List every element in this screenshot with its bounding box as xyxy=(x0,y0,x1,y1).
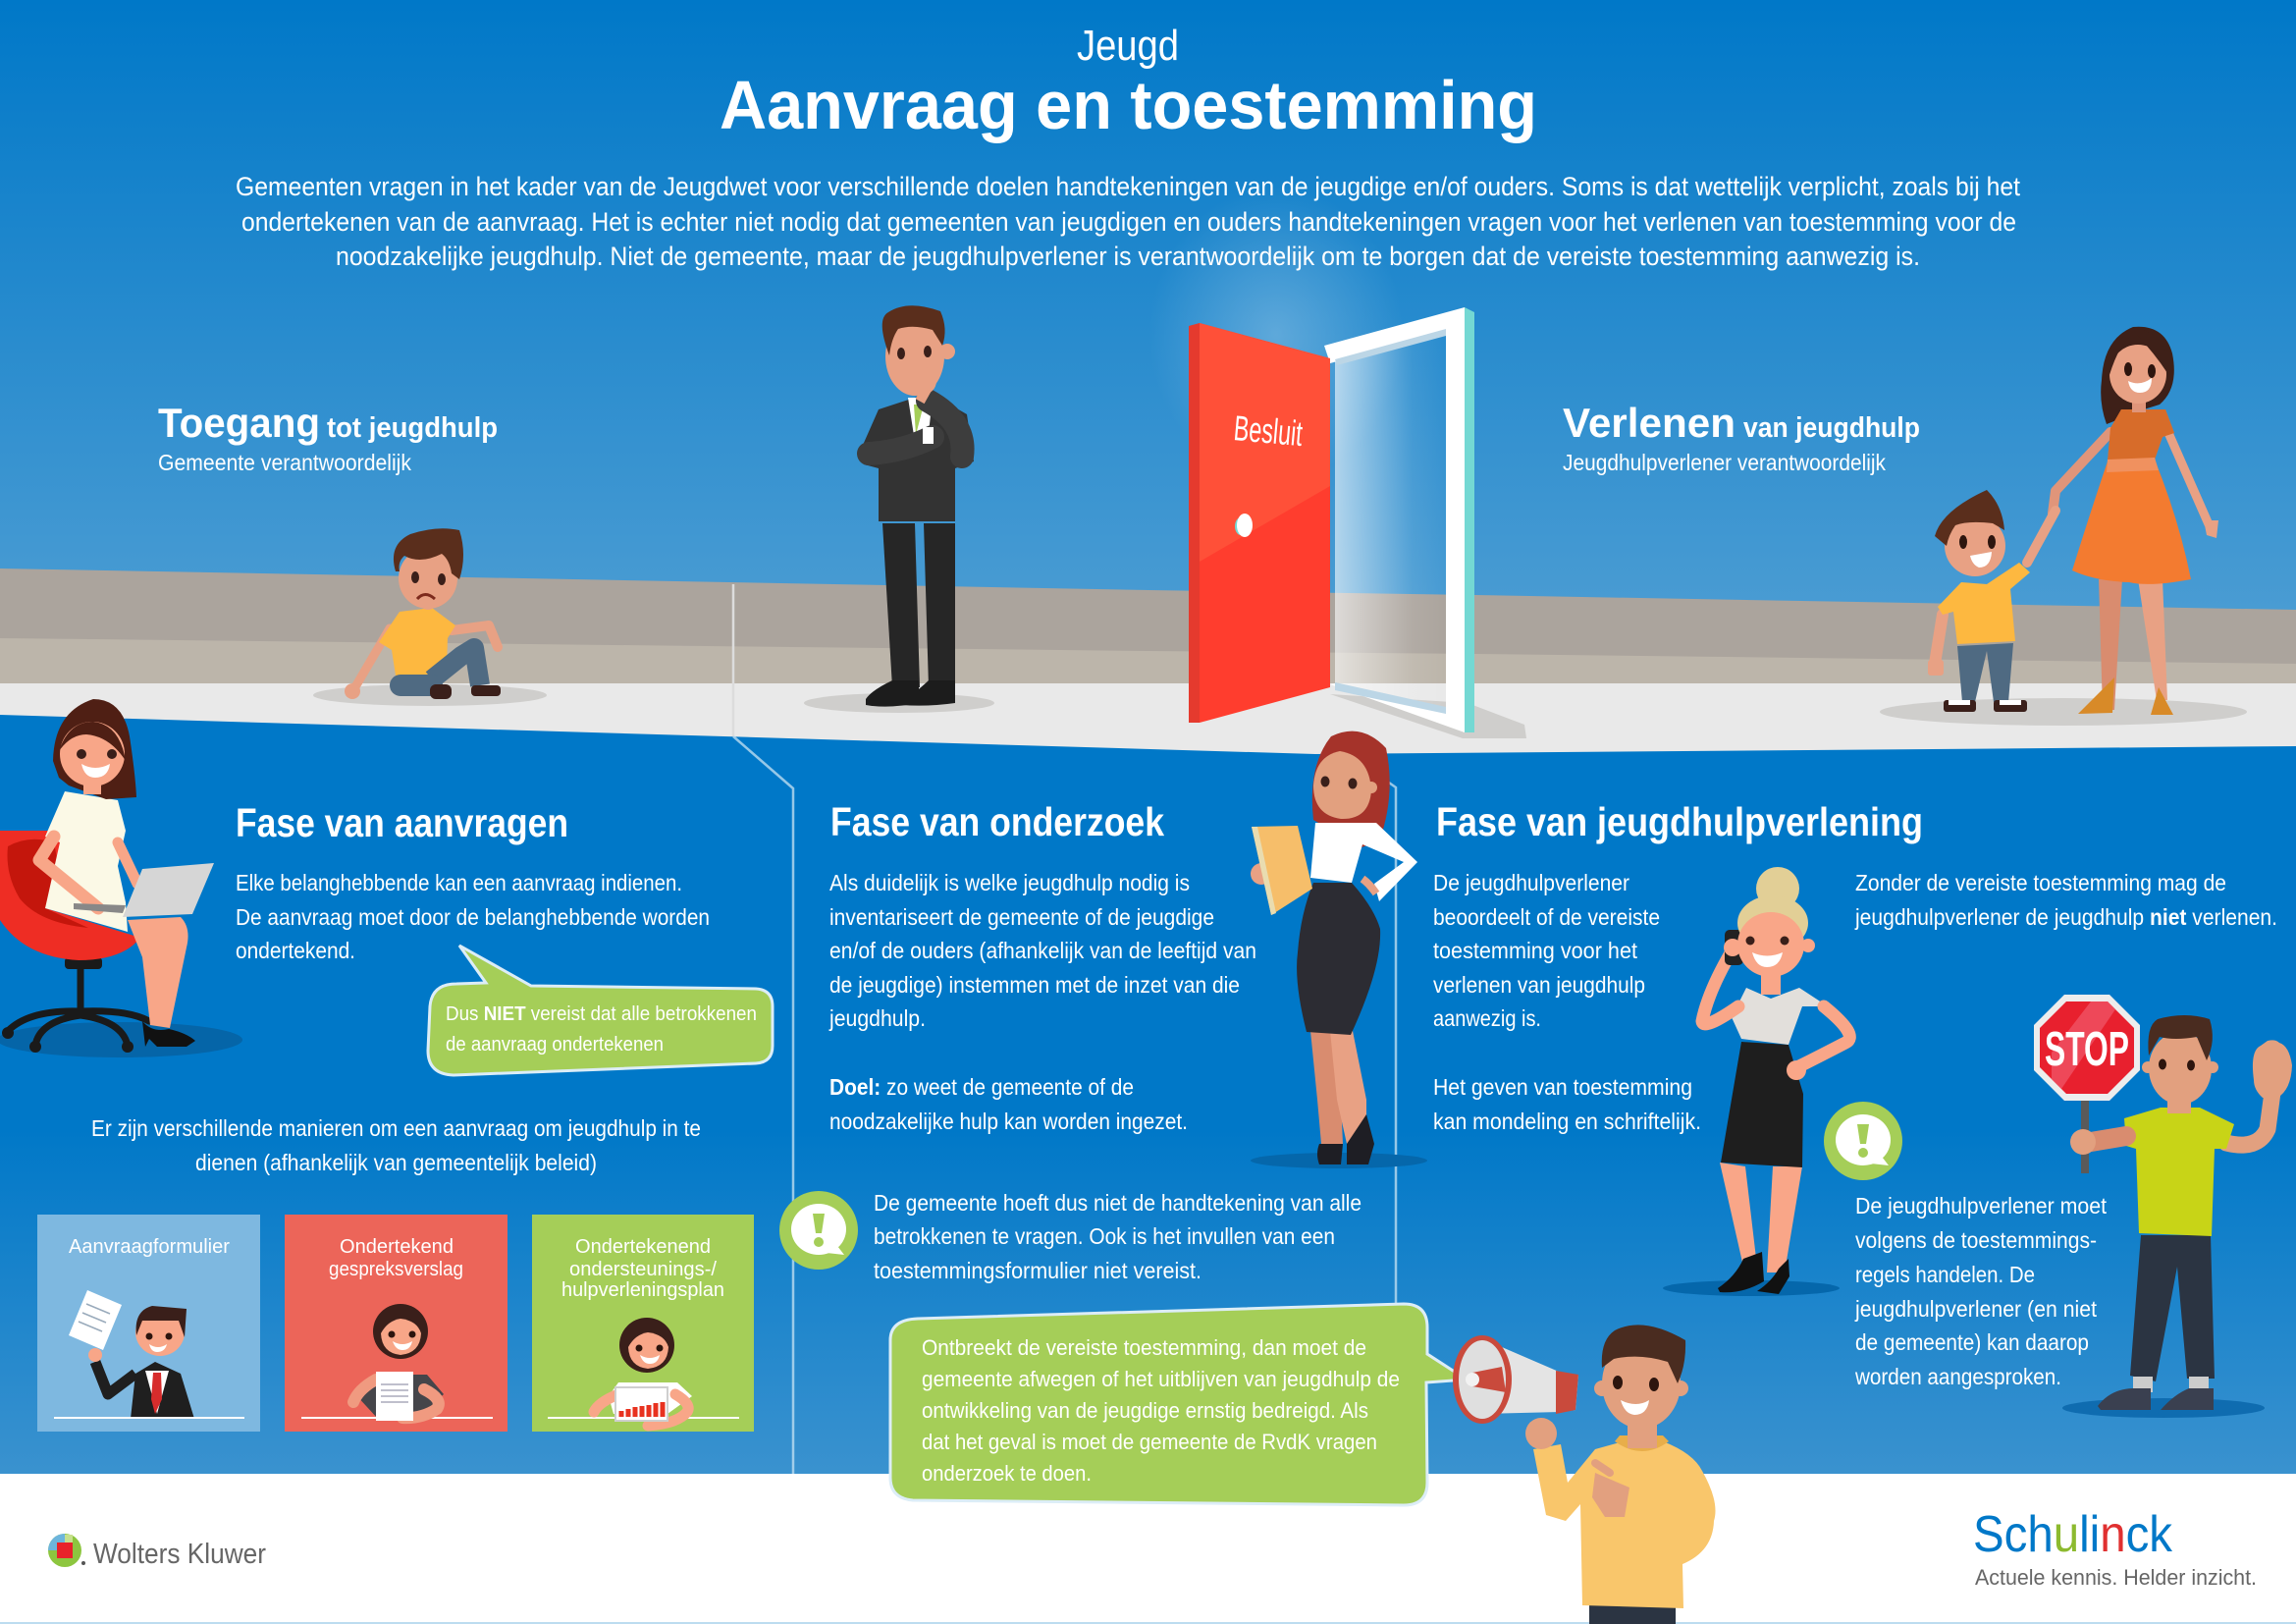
text: zonder toestemming xyxy=(1854,870,2277,930)
card: ondersteunings-/hulpverleningsplan: ondersteunings-/ xyxy=(569,1259,717,1280)
heading: Toegang xyxy=(158,400,498,475)
body text left: kan mondeling en schriftelijk. xyxy=(1433,1109,1701,1134)
heading: Verlenen: Verlenen xyxy=(1563,400,1735,446)
body text left: Het geven van toestemming xyxy=(1433,1074,1692,1100)
illustration: woman on phone xyxy=(1663,867,1849,1296)
illustration: woman with folder xyxy=(1251,731,1427,1168)
logo: Wolters Kluwer: Wolters Kluwer xyxy=(93,1539,266,1570)
logo: Schulinck: Actuele kennis. Helder inzicht. xyxy=(1975,1565,2257,1590)
body text: Als duidelijk is welke jeugdhulp nodig is xyxy=(829,870,1190,895)
wall xyxy=(0,568,2296,687)
card: aanvraagformulier xyxy=(37,1215,260,1432)
body text: inventariseert de gemeente of de jeugdige xyxy=(829,904,1214,930)
heading: Fase van jeugdhulpverlening xyxy=(1436,799,1923,844)
intro paragraph xyxy=(236,172,2020,271)
body text xyxy=(828,870,1256,1134)
text: volgens regels: de gemeente) kan daarop xyxy=(1855,1329,2089,1355)
sky background xyxy=(0,0,2296,614)
body text left: aanwezig is. xyxy=(1433,1005,1541,1031)
intro paragraph: noodzakelijke jeugdhulp. Niet de gemeente, maar de jeugdhulpverlener is verantwoordelijk om te borgen dat de vereiste toestemming aanwezig is. xyxy=(336,242,1920,271)
card: ondertekend gespreksverslag: Ondertekend xyxy=(340,1236,454,1258)
text: volgens regels: De jeugdhulpverlener moet xyxy=(1855,1193,2108,1218)
callout: ontbreekt toestemming: dat het geval is moet de gemeente de RvdK vragen xyxy=(922,1430,1377,1454)
heading: Toegang: Gemeente verantwoordelijk xyxy=(158,450,411,475)
stop sign xyxy=(2034,995,2140,1101)
lower blue panel xyxy=(0,707,2296,1474)
illustration: woman with laptop in red chair xyxy=(0,699,242,1057)
text: handtekening niet nodig: toestemmingsformulier niet vereist. xyxy=(874,1258,1201,1283)
illustration: man with stop sign xyxy=(2034,995,2292,1418)
callout: ontbreekt toestemming: ontwikkeling van de jeugdige ernstig bedreigd. Als xyxy=(922,1398,1368,1423)
illustration: open door xyxy=(1189,307,1526,738)
title block xyxy=(720,22,1537,143)
text: zonder toestemming: jeugdhulpverlener de jeugdhulp niet verlenen. xyxy=(1854,904,2277,930)
heading: Verlenen: van jeugdhulp xyxy=(1743,412,1920,444)
icon: exclamation bubble xyxy=(1824,1102,1902,1180)
text: volgens regels: volgens de toestemmings- xyxy=(1855,1227,2097,1253)
body text left: verlenen van jeugdhulp xyxy=(1433,972,1645,998)
card: ondertekend gespreksverslag: gespreksverslag xyxy=(329,1259,463,1280)
heading: Fase van onderzoek xyxy=(830,799,1164,844)
text: handtekening niet nodig: De gemeente hoeft dus niet de handtekening van alle xyxy=(874,1190,1362,1216)
body text left: beoordeelt of de vereiste xyxy=(1433,904,1660,930)
callout: niet vereist xyxy=(428,946,773,1075)
card: ondertekend gespreksverslag xyxy=(285,1215,507,1432)
intro paragraph: Gemeenten vragen in het kader van de Jeugdwet voor verschillende doelen handtekeningen van de jeugdige en/of ouders. Soms is dat wettelijk verplicht, zoals bij het xyxy=(236,172,2020,201)
heading: Verlenen: Jeugdhulpverlener verantwoordelijk xyxy=(1563,450,1886,475)
body text left xyxy=(1433,870,1701,1134)
panel: fase van jeugdhulpverlening xyxy=(1433,799,2292,1418)
card: ondersteunings-/hulpverleningsplan: hulpverleningsplan xyxy=(561,1279,724,1301)
body text: de jeugdige) instemmen met de inzet van die xyxy=(829,972,1240,998)
text: manieren: Er zijn verschillende manieren om een aanvraag om jeugdhulp in te xyxy=(91,1115,701,1141)
body text: ondertekend. xyxy=(236,938,355,963)
logo: Schulinck xyxy=(1973,1506,2257,1590)
text: manieren xyxy=(91,1115,701,1175)
door handle xyxy=(1235,514,1253,537)
text: handtekening niet nodig: betrokkenen te vragen. Ook is het invullen van een xyxy=(874,1223,1335,1249)
card: aanvraagformulier: Aanvraagformulier xyxy=(69,1236,230,1258)
kicker: Jeugd xyxy=(1077,22,1179,70)
illustration: man with megaphone xyxy=(1453,1325,1716,1624)
body text: De aanvraag moet door de belanghebbende worden xyxy=(236,904,710,930)
panel: fase van aanvragen xyxy=(0,699,773,1432)
callout: ontbreekt toestemming xyxy=(890,1304,1467,1505)
text: volgens regels xyxy=(1854,1193,2108,1389)
stop sign: STOP xyxy=(2045,1023,2129,1076)
body text: Elke belanghebbende kan een aanvraag indienen. xyxy=(236,870,682,895)
body text: jeugdhulp. xyxy=(828,1005,926,1031)
callout: ontbreekt toestemming: Ontbreekt de vereiste toestemming, dan moet de xyxy=(922,1335,1366,1360)
card: ondersteunings-/hulpverleningsplan: Ondertekenend xyxy=(575,1236,711,1258)
text: volgens regels: worden aangesproken. xyxy=(1854,1364,2061,1389)
heading: Toegang: Toegang xyxy=(158,400,320,446)
body text xyxy=(236,870,710,963)
main title: Aanvraag en toestemming xyxy=(720,67,1537,143)
body text: noodzakelijke hulp kan worden ingezet. xyxy=(829,1109,1188,1134)
floor xyxy=(0,683,2296,754)
callout: niet vereist: de aanvraag ondertekenen xyxy=(446,1033,664,1056)
callout: ontbreekt toestemming: onderzoek te doen. xyxy=(922,1461,1092,1486)
callout: ontbreekt toestemming: gemeente afwegen of het uitblijven van jeugdhulp de xyxy=(922,1367,1400,1391)
heading: Verlenen xyxy=(1563,400,1920,475)
body text left: De jeugdhulpverlener xyxy=(1433,870,1629,895)
door label: Besluit xyxy=(1232,407,1305,454)
body text left: toestemming voor het xyxy=(1433,938,1638,963)
illustration: sad boy sitting xyxy=(313,528,547,706)
text: manieren: dienen (afhankelijk van gemeentelijk beleid) xyxy=(195,1150,597,1175)
body text: en/of de ouders (afhankelijk van de leeftijd van xyxy=(829,938,1256,963)
glow behind door xyxy=(1148,187,1404,481)
footer band xyxy=(0,1474,2296,1624)
icon: exclamation bubble xyxy=(779,1191,858,1270)
illustration: thinking man in suit xyxy=(804,305,994,713)
intro paragraph: ondertekenen van de aanvraag. Het is echter niet nodig dat gemeenten van jeugdigen en ouders handtekeningen vragen voor het verlenen van toestemming voor de xyxy=(241,207,2016,237)
panel: fase van onderzoek xyxy=(779,731,1427,1283)
logo: Wolters Kluwer xyxy=(48,1534,266,1570)
heading: Toegang: tot jeugdhulp xyxy=(327,412,498,444)
heading: Fase van aanvragen xyxy=(236,800,568,845)
card: ondersteunings-/hulpverleningsplan xyxy=(532,1215,754,1432)
text: zonder toestemming: Zonder de vereiste toestemming mag de xyxy=(1855,870,2226,895)
text: handtekening niet nodig xyxy=(874,1190,1362,1283)
callout: niet vereist: Dus NIET vereist dat alle betrokkenen xyxy=(446,1002,757,1025)
text: volgens regels: jeugdhulpverlener (en niet xyxy=(1854,1296,2098,1322)
illustration: mother and child xyxy=(1880,327,2247,726)
body text: Doel: zo weet de gemeente of de xyxy=(829,1074,1134,1100)
text: volgens regels: regels handelen. De xyxy=(1855,1262,2035,1287)
logo: Schulinck: Schulinck xyxy=(1973,1506,2173,1563)
